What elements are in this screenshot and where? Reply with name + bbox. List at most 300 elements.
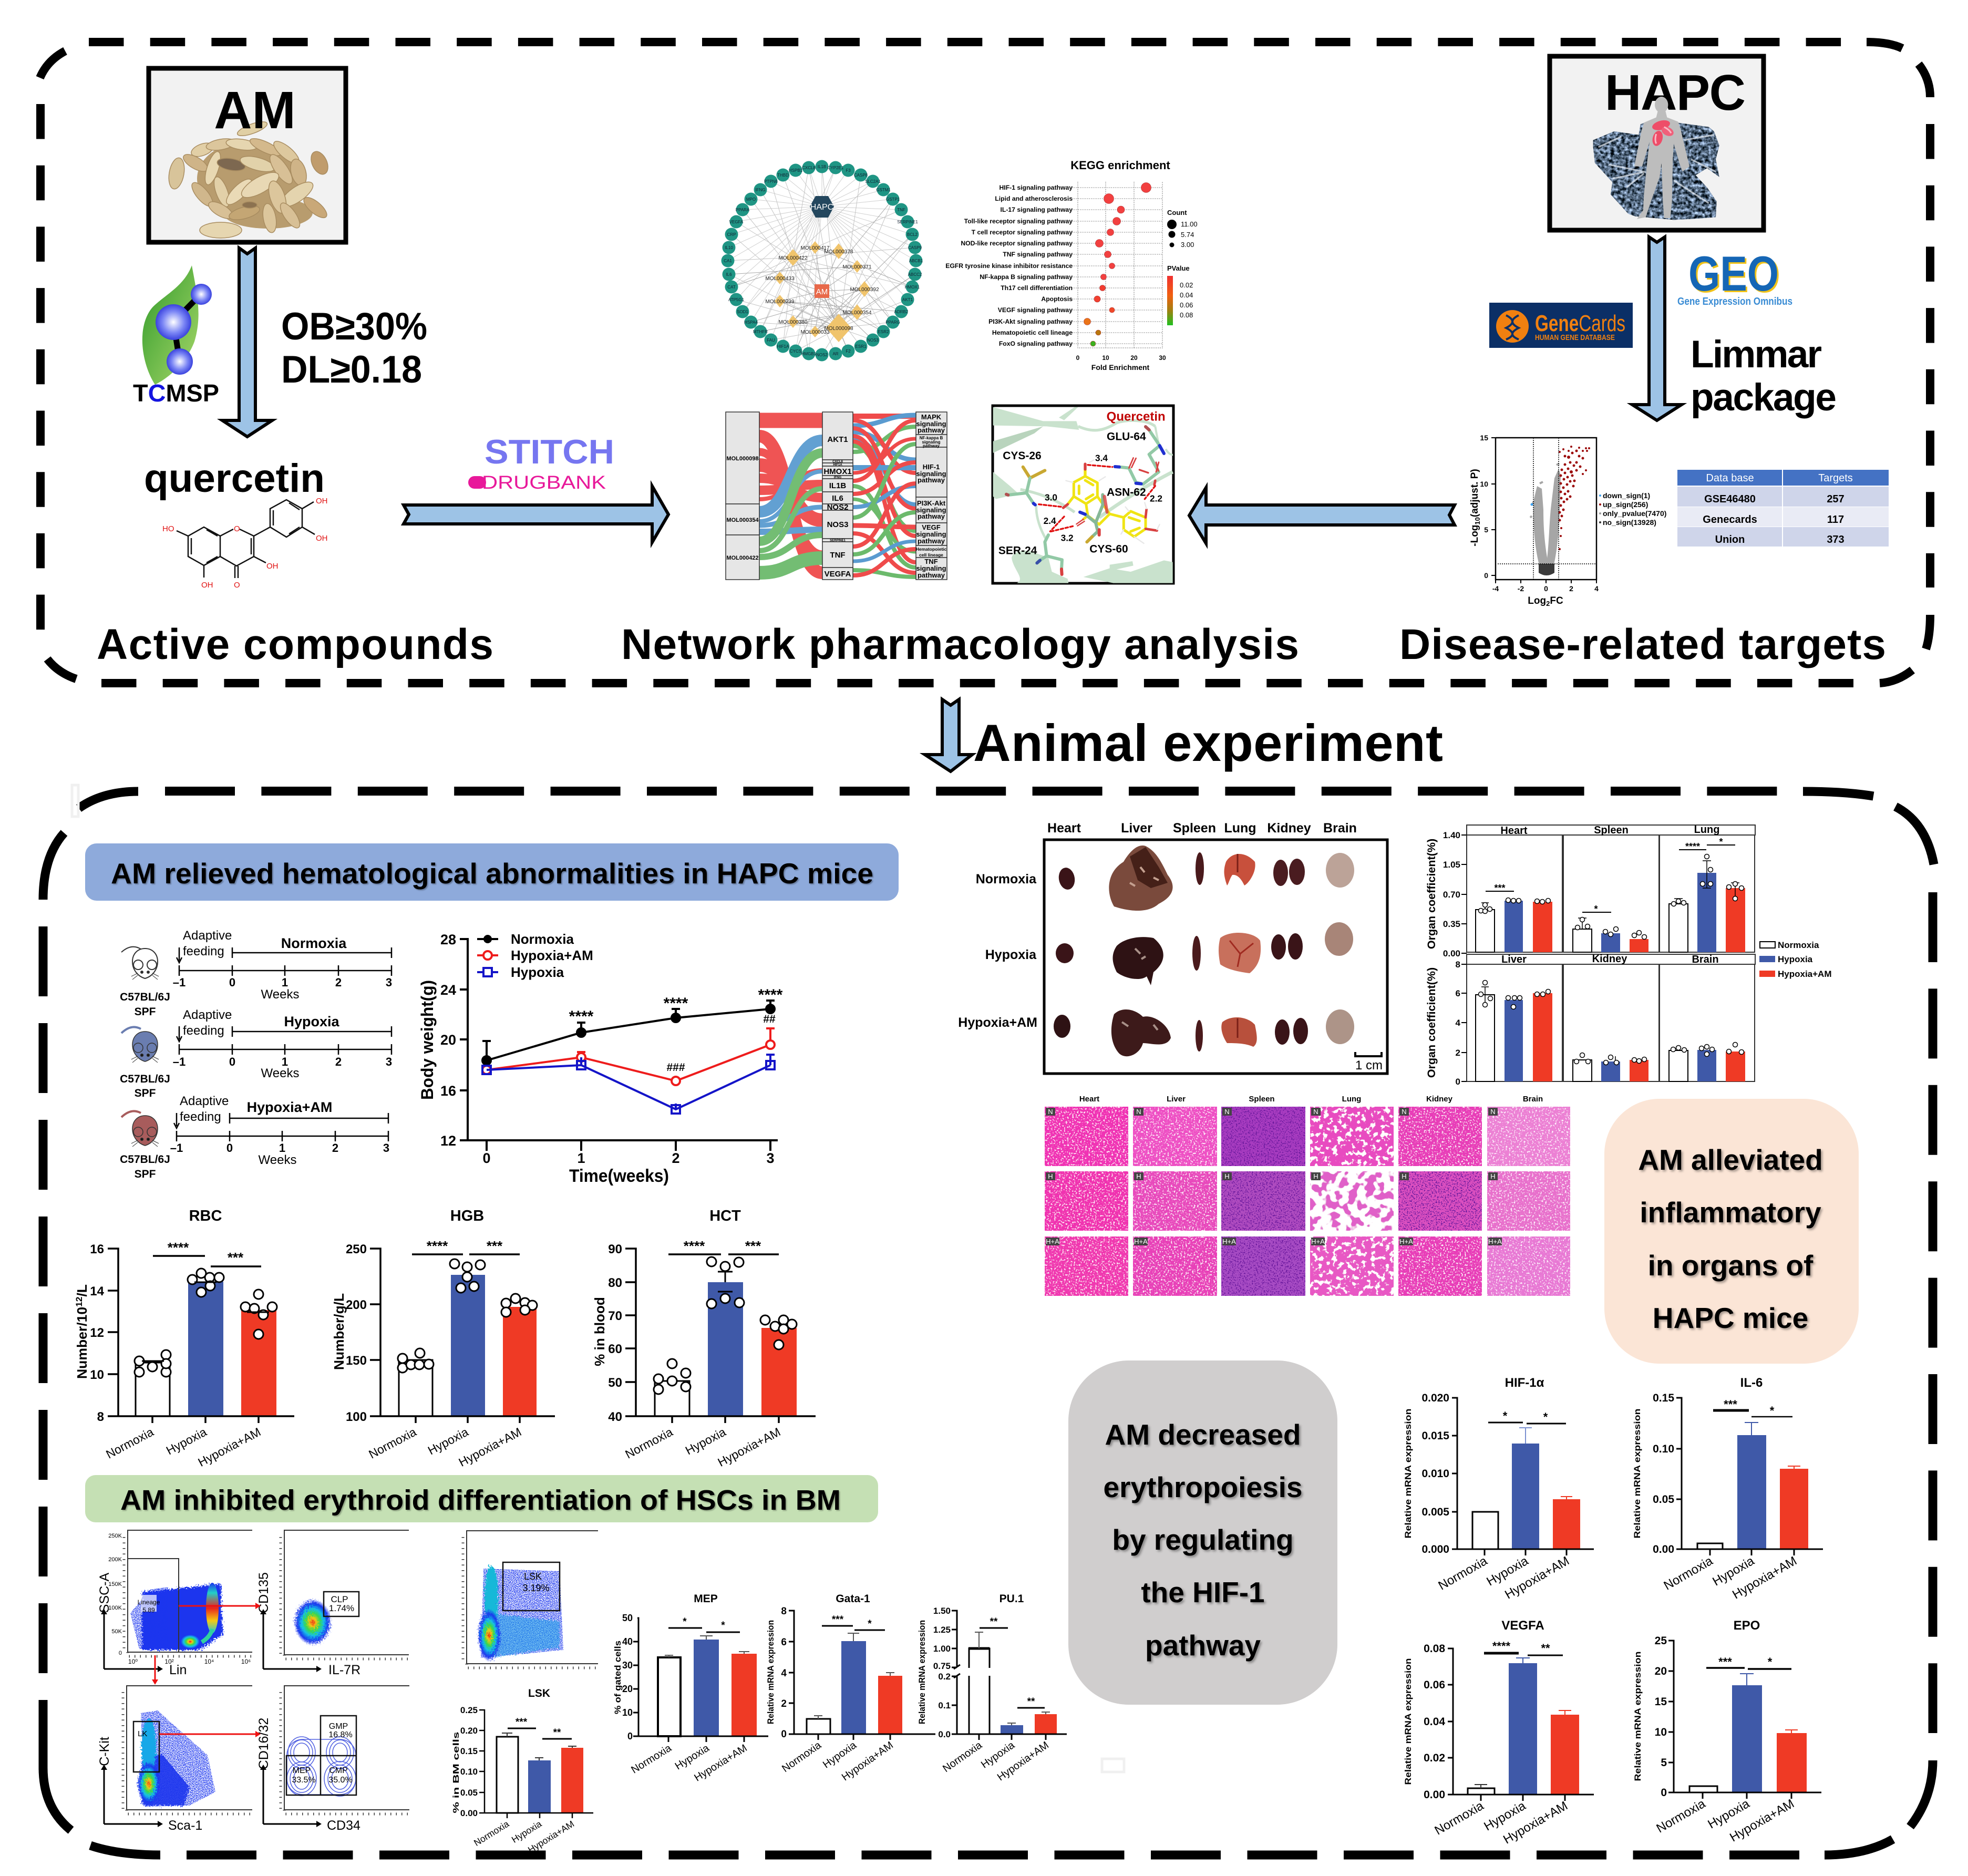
axis tick labels: 5 — [1484, 525, 1488, 534]
protocol: hypoxia timeline: SPF — [135, 1087, 156, 1099]
table: disease targets: 117 — [1827, 514, 1844, 525]
compound labels: MOL000098 — [824, 326, 853, 332]
chart: body weight line chart: 3 — [766, 1150, 775, 1166]
histology column headers: Brain — [1523, 1095, 1543, 1104]
protocol: hypoxia plus AM timeline: 0 — [226, 1141, 233, 1155]
chart: IL-6 mRNA: IL-6 — [1740, 1376, 1763, 1390]
group row labels: Hypoxia — [985, 947, 1037, 962]
illustration: herb slices — [167, 119, 331, 238]
chart: HIF-1 alpha mRNA: 0.015 — [1421, 1430, 1449, 1442]
compound labels: MOL000417 — [800, 245, 830, 251]
compound labels: MOL000371 — [842, 264, 872, 270]
flow cytometry: lineage gate — [108, 1530, 252, 1665]
pathway column — [916, 412, 947, 580]
arrow: to animal experiment — [925, 699, 972, 771]
compound labels: MOL000392 — [850, 287, 879, 293]
target labels: NOS2 — [816, 353, 828, 357]
chart: HCT: 50 — [608, 1376, 622, 1390]
enrichment dots — [1084, 183, 1151, 346]
compound labels: MOL000354 — [842, 310, 872, 316]
icon: red mouse — [121, 1111, 159, 1147]
histology group tags — [1046, 1108, 1502, 1245]
chart: body weight line chart: 12 — [440, 1133, 456, 1149]
histology group tags: H — [1136, 1172, 1141, 1180]
chart: LSK bars: ** — [553, 1727, 561, 1738]
chart: HIF-1 alpha mRNA: Hypoxia+AM — [1502, 1554, 1572, 1602]
chart: organ coefficient upper: 1.40 — [1443, 830, 1460, 840]
volcano legend — [1599, 491, 1666, 527]
chart: HIF-1 alpha mRNA: 0.020 — [1421, 1392, 1449, 1404]
dashed frame: animal experiment section — [43, 791, 1934, 1855]
flow cytometry: lineage gate: 0 — [119, 1650, 122, 1656]
pathway labels: Apoptosis — [1041, 295, 1073, 303]
target column: SERPINE1 — [830, 539, 846, 542]
flow cytometry: LSK gate — [463, 1531, 598, 1668]
protocol: normoxia timeline — [120, 929, 392, 1018]
significance marks: **** — [758, 986, 783, 1004]
flows: compounds to targets — [759, 420, 822, 573]
pathway column: NF-kappa B — [920, 436, 943, 440]
chart: IL-6 mRNA: 0.10 — [1653, 1443, 1674, 1455]
flow cytometry: LSK gate: LSK — [524, 1571, 542, 1582]
chart: EPO mRNA: Normoxia — [1654, 1796, 1708, 1836]
protocol: hypoxia timeline: –1 — [173, 1055, 186, 1068]
target column: HMOX1 — [823, 467, 852, 476]
chart: MEP bars: 0 — [627, 1731, 633, 1741]
target column — [822, 412, 853, 580]
flow cytometry: GMP MEP CMP gates — [281, 1686, 409, 1814]
chart: HGB: **** — [427, 1238, 448, 1254]
axis labels: 0 — [1076, 354, 1080, 362]
protocol: normoxia timeline: Adaptive — [183, 929, 232, 943]
target labels: TNF — [897, 208, 905, 212]
chart: Gata-1 bars: 2 — [781, 1698, 787, 1709]
organ column headers: Heart — [1047, 821, 1081, 836]
histology column headers: Heart — [1079, 1095, 1099, 1104]
histology column headers: Kidney — [1426, 1095, 1453, 1104]
text: screening criteria: OB≥30% — [281, 305, 427, 348]
legend: count and p value: 0.06 — [1180, 301, 1193, 309]
flow cytometry: GMP MEP CMP gates: MEP — [293, 1766, 311, 1775]
chart: body weight line chart: 24 — [440, 982, 456, 998]
compound column: MOL000354 — [726, 517, 759, 523]
histology row: normoxia — [1045, 1107, 1570, 1166]
target labels: CYCS — [790, 349, 801, 354]
flow cytometry: lineage gate: 10² — [164, 1658, 174, 1665]
chart: IL-6 mRNA: Hypoxia+AM — [1730, 1554, 1799, 1602]
flow cytometry: GMP MEP CMP gates: 33.5% — [292, 1776, 316, 1785]
chart: IL-6 mRNA — [1632, 1376, 1823, 1602]
chart: HCT: 40 — [608, 1410, 622, 1424]
chart: HGB — [331, 1208, 555, 1469]
callout: AM alleviated inflammatory: AM alleviated — [1638, 1143, 1823, 1176]
pathway labels: Hematopoietic cell lineage — [992, 329, 1073, 336]
molecule: quercetin structure: O — [234, 524, 240, 533]
target labels: HSPA4 — [744, 320, 758, 325]
legend: count and p value: 3.00 — [1181, 241, 1194, 249]
pathway column: signaling — [916, 470, 946, 478]
chart: VEGFA mRNA: Hypoxia+AM — [1501, 1799, 1570, 1847]
molecule: quercetin structure: O — [234, 581, 240, 590]
chart: organ coefficient lower: 8 — [1456, 960, 1460, 970]
volcano cloud — [1530, 463, 1561, 575]
chart: HGB: *** — [487, 1238, 503, 1254]
chart: body weight line chart: 16 — [440, 1083, 456, 1099]
chart: PU.1 bars: 0.0 — [938, 1729, 951, 1739]
compound column — [726, 412, 759, 580]
protocol: hypoxia plus AM timeline: C57BL/6J — [120, 1153, 170, 1166]
histology group tags: N — [1402, 1108, 1407, 1116]
chart: VEGFA mRNA — [1403, 1619, 1594, 1847]
chart: PU.1 bars: Relative mRNA expression — [917, 1620, 927, 1724]
chart: IL-6 mRNA: 0.00 — [1653, 1543, 1674, 1555]
flow axes and gating arrows: CD135 — [256, 1572, 271, 1613]
axis tick labels: 4 — [1594, 584, 1599, 593]
pathway labels: Th17 cell differentiation — [1001, 284, 1073, 292]
chart: HCT: Normoxia — [623, 1425, 675, 1461]
pathway labels: PI3K-Akt signaling pathway — [988, 318, 1073, 325]
y axis title: -Log — [1469, 525, 1480, 547]
banner: AM relieved hematological abnormalities — [85, 843, 899, 901]
target labels: CASP9 — [908, 245, 922, 250]
compound column: MOL000098 — [726, 456, 759, 462]
target labels: HSPB1 — [789, 168, 803, 173]
panel: organ photographs — [958, 821, 1387, 1074]
pathway labels: IL-17 signaling pathway — [1001, 206, 1073, 213]
chart: Gata-1 bars: Normoxia — [780, 1739, 824, 1775]
table: disease targets: GSE46480 — [1704, 493, 1756, 505]
legend: count and p value: 11.00 — [1181, 220, 1198, 228]
text: Limmar package — [1691, 333, 1837, 419]
chart: IL-6 mRNA: Normoxia — [1662, 1553, 1716, 1593]
axis tick labels: -4 — [1492, 584, 1499, 593]
chart: HCT: % in blood — [592, 1297, 607, 1366]
chart title: KEGG enrichment — [1070, 159, 1170, 172]
chart: EPO mRNA: 5 — [1661, 1757, 1667, 1769]
chart: HIF-1 alpha mRNA: Relative mRNA expression — [1403, 1408, 1413, 1539]
compound column: MOL000422 — [726, 555, 759, 561]
chart: VEGFA mRNA: 0.06 — [1424, 1679, 1445, 1691]
banner: AM inhibited erythroid differentiation — [85, 1475, 878, 1522]
chart: HCT: Hypoxia — [683, 1425, 728, 1457]
chart: IL-6 mRNA: *** — [1724, 1398, 1737, 1411]
organs: normoxia row — [1057, 846, 1354, 911]
chart: body weight line chart: 2 — [672, 1150, 680, 1166]
heading: quercetin: quercetin — [144, 456, 325, 501]
target labels: CRP — [727, 232, 736, 237]
chart: EPO mRNA — [1633, 1619, 1821, 1845]
docking labels — [998, 410, 1166, 557]
chart: HIF-1 alpha mRNA: * — [1543, 1410, 1548, 1424]
chart: LSK bars: *** — [516, 1717, 528, 1728]
legend: count and p value: PValue — [1167, 264, 1190, 272]
chart: organ coefficient lower: 2 — [1456, 1048, 1460, 1058]
flow cytometry: GMP MEP CMP gates: CMP — [329, 1766, 348, 1775]
text: screening criteria — [281, 305, 427, 391]
ligand sticks — [1063, 460, 1160, 543]
target labels: PPARG — [885, 320, 900, 325]
organ column headers — [1047, 821, 1357, 836]
chart: LSK bars: 0.00 — [460, 1808, 478, 1818]
flow cytometry: lineage gate: Lineage — [138, 1599, 160, 1606]
target labels: PPARA — [736, 208, 750, 212]
organ column headers: Brain — [1323, 821, 1357, 836]
target labels: IL10 — [725, 245, 733, 250]
target labels: F3 — [846, 168, 851, 173]
flow cytometry: LK gate — [123, 1686, 252, 1814]
target labels: FAU — [767, 338, 775, 343]
docking labels: ASN-62 — [1107, 487, 1146, 499]
pathway labels: HIF-1 signaling pathway — [1000, 184, 1073, 191]
flow cytometry: GMP MEP CMP gates: 35.0% — [328, 1776, 353, 1785]
node: HAPC hub: HAPC — [810, 203, 833, 212]
docking labels: 3.4 — [1095, 452, 1108, 463]
protocol: hypoxia timeline: 3 — [386, 1055, 392, 1068]
callout: AM alleviated inflammatory: in organs of — [1648, 1249, 1814, 1282]
legend: organ coefficient groups: Normoxia — [1778, 940, 1819, 950]
label: HAPC: HAPC — [1605, 65, 1746, 121]
protocol: normoxia timeline: feeding — [183, 944, 224, 958]
protocol: hypoxia plus AM timeline: SPF — [135, 1168, 156, 1180]
illustration: human figure with lungs — [1634, 97, 1689, 219]
flow cytometry: LK gate: LK — [138, 1729, 147, 1738]
chart: EPO mRNA: *** — [1718, 1655, 1732, 1668]
series: hypoxia plus AM — [482, 1028, 775, 1085]
chart: organ coefficient upper: 1.05 — [1443, 860, 1460, 870]
chart: HCT: Hypoxia+AM — [715, 1425, 782, 1469]
chart: body weight line chart: ### — [666, 1061, 685, 1074]
chart: RBC: Hypoxia — [164, 1425, 209, 1457]
flow axes and gating arrows: SSC-A — [97, 1572, 112, 1613]
protocol: normoxia timeline: C57BL/6J — [120, 991, 170, 1003]
x axis title: 2 — [1546, 600, 1550, 607]
legend: count and p value — [1167, 209, 1198, 325]
target labels: CXCL8 — [802, 166, 816, 170]
volcano legend: only_pvalue(7470) — [1603, 509, 1666, 518]
group row labels: Normoxia — [976, 872, 1037, 887]
target labels: NOS3 — [867, 338, 879, 343]
histology group tags: H+A — [1046, 1238, 1059, 1245]
target labels: MTHFR — [753, 329, 768, 334]
chart: HGB: Normoxia — [366, 1425, 419, 1461]
icon: TCMSP logo — [133, 265, 219, 407]
histology group tags: H — [1224, 1172, 1230, 1180]
flow cytometry: lineage gate: 10⁰ — [128, 1658, 138, 1665]
chart: HGB: Hypoxia — [426, 1425, 471, 1457]
chart: LSK bars: Hypoxia — [510, 1818, 543, 1845]
chart: Gata-1 bars: 8 — [781, 1606, 787, 1617]
x axis title: FC — [1550, 595, 1563, 606]
chart: EPO mRNA: * — [1768, 1655, 1773, 1668]
axis tick labels: 0 — [1484, 571, 1488, 580]
logo: GeneCards: HUMAN GENE DATABASE — [1535, 333, 1615, 342]
chart: HIF-1 alpha mRNA: Hypoxia — [1484, 1553, 1531, 1589]
table: disease targets: Union — [1715, 534, 1745, 545]
volcano legend: up_sign(256) — [1603, 500, 1648, 509]
chart: VEGFA mRNA: Hypoxia — [1481, 1798, 1529, 1834]
chart: LSK bars: Hypoxia+AM — [526, 1818, 576, 1855]
flow cytometry: CLP gate: 1.74% — [329, 1603, 354, 1613]
chart: RBC: 14 — [90, 1284, 105, 1298]
panel: molecular docking of quercetin — [993, 406, 1173, 583]
logo: GEO: GEO — [1688, 246, 1779, 301]
compound labels: MOL000380 — [778, 319, 808, 325]
chart: HIF-1 alpha mRNA: 0.010 — [1421, 1468, 1449, 1480]
target labels: SOD1 — [737, 310, 748, 314]
chart: organ coefficient upper: Heart — [1500, 825, 1528, 837]
chart: organ coefficient upper: *** — [1494, 883, 1506, 893]
chart: PU.1 bars: ** — [990, 1616, 998, 1627]
chart: HCT: 90 — [608, 1242, 622, 1256]
target column: AKT1 — [827, 435, 848, 444]
docking labels: CYS-26 — [1003, 450, 1042, 462]
chart: RBC: RBC — [189, 1208, 222, 1224]
flow cytometry: lineage gate: 10⁴ — [204, 1658, 214, 1665]
histology group tags: N — [1224, 1108, 1230, 1116]
chart: EPO mRNA: 15 — [1655, 1696, 1667, 1708]
chart: organ coefficient upper: **** — [1685, 841, 1700, 852]
legend: count and p value: 5.74 — [1181, 231, 1194, 239]
callout: AM decreased erythropoiesis: erythropoiesis — [1103, 1471, 1303, 1503]
protocol: hypoxia plus AM timeline: 1 — [279, 1141, 285, 1155]
chart: HIF-1 alpha mRNA — [1403, 1376, 1594, 1602]
chart: PU.1 bars: Normoxia — [941, 1739, 985, 1775]
chart: LSK bars: 0.10 — [460, 1767, 478, 1777]
axis tick labels: 10 — [1480, 480, 1488, 488]
target column: NOS2 — [827, 503, 848, 512]
molecule: quercetin structure: OH — [201, 581, 213, 590]
histology grid — [1045, 1095, 1570, 1296]
histology group tags: H+A — [1222, 1238, 1236, 1245]
pathway column: signaling — [916, 420, 946, 428]
chart: EPO mRNA: Hypoxia+AM — [1727, 1797, 1797, 1845]
target labels — [724, 164, 923, 357]
histology group tags: H — [1402, 1172, 1407, 1180]
target labels: ABCC2 — [908, 272, 922, 277]
molecule: quercetin structure: HO — [162, 524, 174, 533]
flow axes and gating arrows: CD34 — [327, 1818, 360, 1833]
chart: body weight line chart — [418, 931, 783, 1186]
legend: Normoxia — [511, 931, 574, 947]
chart: RBC: 12 — [90, 1326, 104, 1340]
molecule: quercetin structure: OH — [266, 562, 279, 571]
chart: Gata-1 bars: *** — [832, 1614, 844, 1625]
chart: HIF-1 alpha mRNA: HIF-1α — [1505, 1376, 1544, 1390]
target labels: MPO — [746, 197, 756, 202]
pathway labels: Toll-like receptor signaling pathway — [964, 218, 1073, 225]
chart: RBC: Number/10 — [74, 1308, 90, 1379]
compound labels: MOL000033 — [800, 329, 830, 335]
legend: organ coefficient groups: Hypoxia — [1778, 954, 1813, 964]
protocol: hypoxia timeline: Weeks — [261, 1066, 299, 1080]
target labels: ESR2 — [878, 329, 889, 334]
pathway labels: Lipid and atherosclerosis — [995, 195, 1073, 202]
legend: count and p value: 0.08 — [1180, 311, 1193, 319]
pathway column: TNF — [924, 558, 938, 565]
protocol: hypoxia plus AM timeline — [120, 1094, 389, 1180]
banner: AM inhibited erythroid differentiation: AM inhibited erythroid differentiation of HSCs in BM — [120, 1485, 841, 1516]
chart: organ coefficient lower: Organ coefficient(%) — [1425, 967, 1438, 1078]
axis labels: 30 — [1159, 354, 1166, 362]
table: disease targets: Data base — [1706, 472, 1754, 484]
chart: EPO mRNA: 10 — [1655, 1726, 1667, 1738]
histology row: hypoxia — [1045, 1171, 1570, 1231]
histology column headers: Lung — [1342, 1095, 1361, 1104]
section heading: network pharmacology analysis: Network pharmacology analysis — [621, 621, 1299, 668]
text: Limmar package: package — [1691, 376, 1837, 419]
chart: LSK bars: 0.20 — [460, 1726, 478, 1736]
chart: organ coefficient upper — [1425, 824, 1755, 958]
chart: body weight line chart: 0 — [482, 1150, 491, 1166]
chart: organ coefficient upper: Lung — [1694, 824, 1719, 836]
target labels: VEGFA — [729, 220, 744, 224]
chart: LSK bars — [452, 1687, 593, 1855]
logo: STITCH: STITCH — [485, 432, 614, 471]
target labels: CYP2E1 — [828, 166, 844, 170]
chart: RBC: **** — [168, 1240, 189, 1255]
significance marks: **** — [569, 1008, 594, 1025]
chart: MEP bars: * — [683, 1616, 687, 1627]
axis titles: Time(weeks) — [569, 1166, 669, 1186]
arrow: HAPC to volcano plot — [1632, 237, 1682, 420]
docking labels: 3.0 — [1045, 492, 1057, 503]
pathway labels: EGFR tyrosine kinase inhibitor resistance — [945, 262, 1073, 270]
chart: HGB: 250 — [346, 1242, 367, 1256]
chart: Gata-1 bars: Gata-1 — [836, 1593, 870, 1605]
significance marks: **** — [664, 995, 688, 1012]
chart: organ coefficient upper: * — [1719, 837, 1723, 847]
chart: VEGFA mRNA: Normoxia — [1433, 1798, 1487, 1838]
legend: count and p value: Count — [1167, 209, 1187, 217]
legend: count and p value: 0.02 — [1180, 281, 1193, 289]
target labels: ESR1 — [856, 344, 867, 349]
down-regulated point — [1530, 503, 1533, 506]
chart: organ coefficient upper: Organ coefficient(%) — [1425, 839, 1438, 949]
chart: organ coefficient lower — [1425, 953, 1755, 1087]
text: screening criteria: DL≥0.18 — [281, 348, 422, 391]
compound labels: MOL000378 — [824, 249, 853, 255]
histology group tags: H+A — [1134, 1238, 1148, 1245]
callout: AM decreased erythropoiesis — [1068, 1360, 1337, 1705]
target labels: HMOX1 — [905, 285, 920, 290]
target labels: IL1B — [818, 164, 826, 169]
histology group tags: N — [1048, 1108, 1053, 1116]
axis tick labels: 2 — [1569, 584, 1573, 593]
protocol: normoxia timeline: 3 — [386, 976, 392, 989]
target labels: ABCB1 — [909, 259, 923, 263]
flow axes and gating arrows: IL-7R — [328, 1663, 360, 1677]
chart: MEP bars: 10 — [622, 1707, 633, 1718]
table: disease targets — [1677, 470, 1889, 547]
axis tick labels: -2 — [1518, 584, 1524, 593]
organ column headers: Liver — [1121, 821, 1152, 836]
flow axes and gating arrows: Sca-1 — [168, 1818, 202, 1833]
flow cytometry: lineage gate: 50K — [111, 1628, 122, 1635]
legend: organ coefficient groups: Hypoxia+AM — [1778, 969, 1832, 979]
stray outline box near frame corner — [72, 785, 78, 817]
chart: IL-6 mRNA: Hypoxia — [1710, 1553, 1757, 1589]
chart: IL-6 mRNA: 0.05 — [1653, 1493, 1674, 1506]
chart: HGB: 100 — [346, 1410, 367, 1424]
pathway column: signaling — [916, 530, 946, 538]
heading: animal experiment: Animal experiment — [973, 714, 1443, 772]
scale bar — [1355, 1052, 1383, 1073]
chart: PU.1 bars: Hypoxia — [979, 1739, 1017, 1771]
chart: Gata-1 bars: Relative mRNA expression — [766, 1620, 776, 1724]
chart: HIF-1 alpha mRNA: * — [1503, 1409, 1508, 1423]
group row labels — [958, 872, 1037, 1030]
organs: hypoxia plus AM row — [1054, 1009, 1354, 1056]
